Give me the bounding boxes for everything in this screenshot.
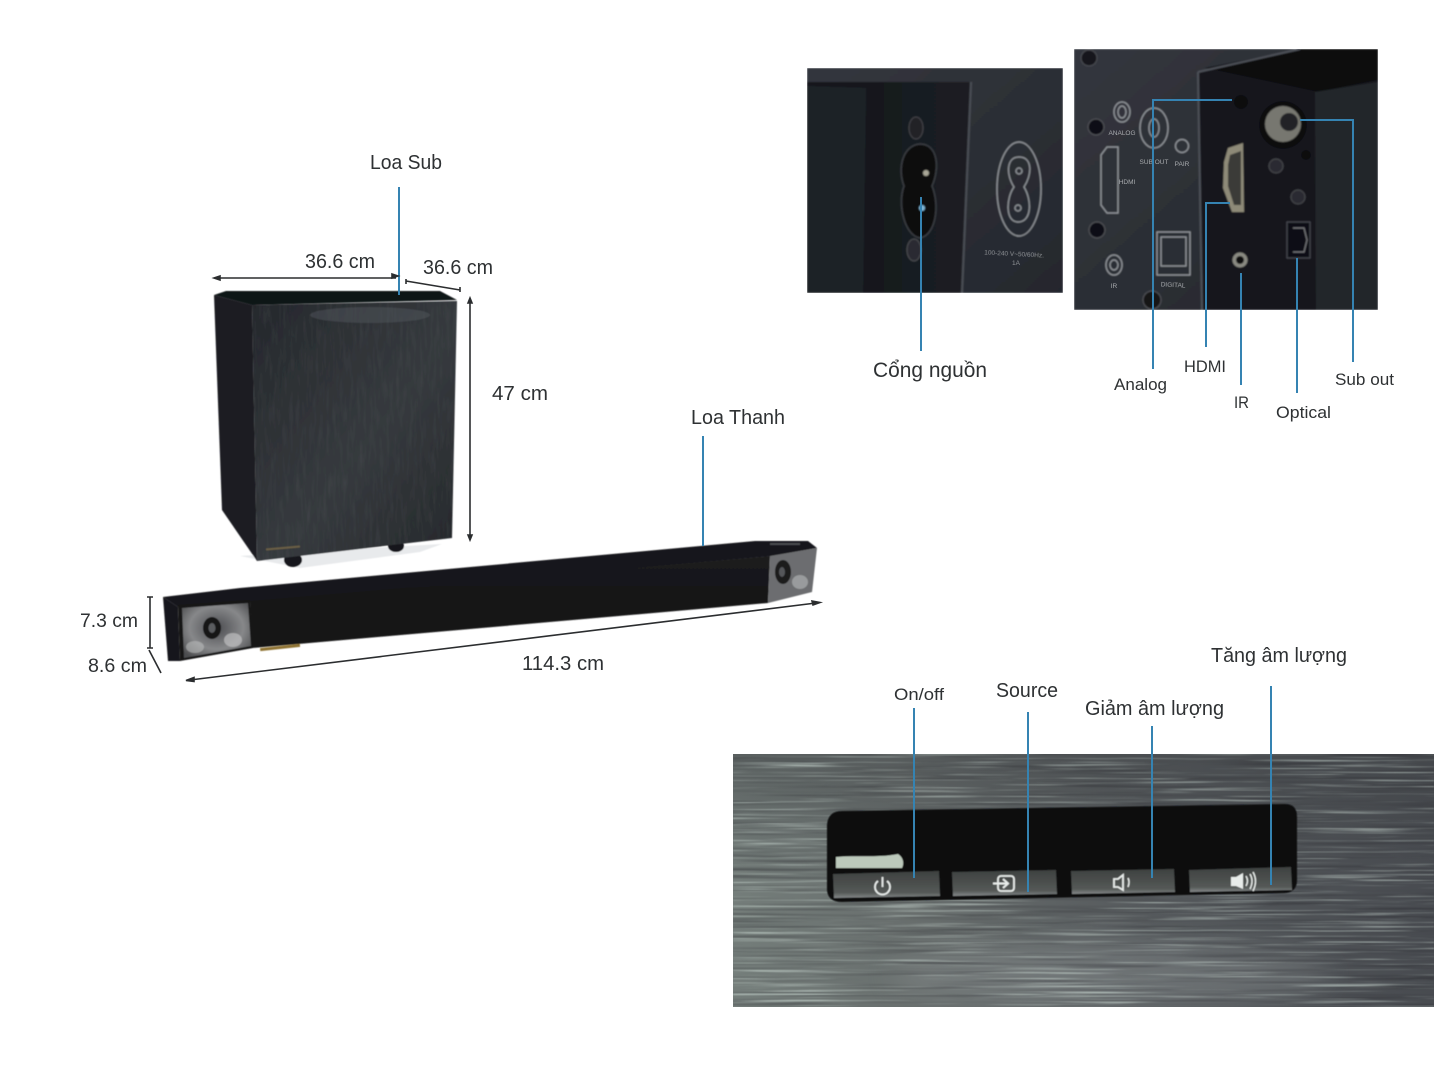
leader line: Giảm âm lượng bbox=[1151, 726, 1153, 878]
photo: brushed metal background bbox=[733, 754, 1434, 1009]
leader line: On/off bbox=[913, 708, 915, 878]
dimension arrow: width bbox=[214, 274, 398, 280]
label: Analog: Analog bbox=[1114, 375, 1167, 394]
text: ampere: 1A bbox=[1012, 260, 1021, 267]
label: Sub out: Sub out bbox=[1335, 370, 1394, 389]
text: DIGITAL: DIGITAL bbox=[1161, 281, 1186, 290]
button: volume down bbox=[1071, 869, 1175, 894]
label: Optical: Optical bbox=[1276, 403, 1331, 422]
leader line: Optical bbox=[1296, 258, 1298, 393]
dimension arrow: depth bbox=[406, 279, 460, 292]
label: Giảm âm lượng: Giảm âm lượng bbox=[1085, 698, 1224, 720]
label: Tăng âm lượng: Tăng âm lượng bbox=[1211, 645, 1347, 667]
leader line: HDMI bbox=[1206, 203, 1230, 347]
panel: connection ports photo bbox=[1074, 49, 1394, 422]
leader line: Loa Sub bbox=[398, 187, 400, 295]
leader line: Source bbox=[1027, 712, 1029, 892]
dimension: height 47 cm: 47 cm bbox=[492, 383, 548, 405]
button: power bbox=[833, 871, 940, 898]
dimension arrow: length bbox=[186, 601, 820, 682]
leader line: Analog bbox=[1153, 100, 1232, 369]
dimension: depth 8.6 cm: 8.6 cm bbox=[88, 656, 147, 677]
text: PAIR: PAIR bbox=[1175, 161, 1190, 168]
panel: power port photo bbox=[807, 68, 1063, 382]
leader line: Sub out bbox=[1300, 120, 1353, 362]
leader line: IR bbox=[1240, 273, 1242, 385]
panel: control buttons photo bbox=[733, 645, 1434, 1009]
label: Source: Source bbox=[996, 680, 1058, 702]
label: On/off: On/off bbox=[894, 685, 944, 704]
photo: power socket bbox=[807, 68, 1063, 293]
label: Loa Thanh: Loa Thanh bbox=[691, 407, 785, 429]
panel: subwoofer dimensions bbox=[214, 152, 548, 568]
panel: soundbar dimensions bbox=[80, 407, 820, 682]
button: source bbox=[952, 870, 1057, 896]
text: power rating: 100-240 V~50/60Hz. bbox=[984, 249, 1044, 260]
label: HDMI: HDMI bbox=[1184, 357, 1226, 376]
image: soundbar bbox=[163, 541, 817, 661]
label: IR: IR bbox=[1234, 393, 1249, 412]
image: subwoofer bbox=[214, 291, 457, 568]
text: ANALOG: ANALOG bbox=[1108, 130, 1136, 137]
dimension arrow: height bbox=[468, 298, 472, 540]
leader line: Cổng nguồn bbox=[920, 197, 922, 351]
leader line: Loa Thanh bbox=[702, 436, 704, 546]
button: volume up bbox=[1189, 867, 1292, 892]
label: Loa Sub: Loa Sub bbox=[370, 152, 442, 174]
photo: ports bbox=[1074, 49, 1378, 310]
leader line: Tăng âm lượng bbox=[1270, 686, 1272, 885]
button tray bbox=[827, 804, 1297, 902]
dimension: height 7.3 cm: 7.3 cm bbox=[80, 611, 138, 632]
text: IR: IR bbox=[1111, 283, 1118, 290]
text: SUB OUT: SUB OUT bbox=[1140, 159, 1168, 166]
dimension: length 114.3 cm: 114.3 cm bbox=[522, 653, 604, 675]
dimension line: height bbox=[147, 597, 153, 648]
dimension: width 36.6 cm: 36.6 cm bbox=[305, 251, 375, 273]
label: Cổng nguồn: Cổng nguồn bbox=[873, 359, 987, 382]
dimension line: depth bbox=[149, 650, 161, 673]
text: HDMI: HDMI bbox=[1119, 179, 1135, 186]
dimension: depth 36.6 cm: 36.6 cm bbox=[423, 257, 493, 279]
